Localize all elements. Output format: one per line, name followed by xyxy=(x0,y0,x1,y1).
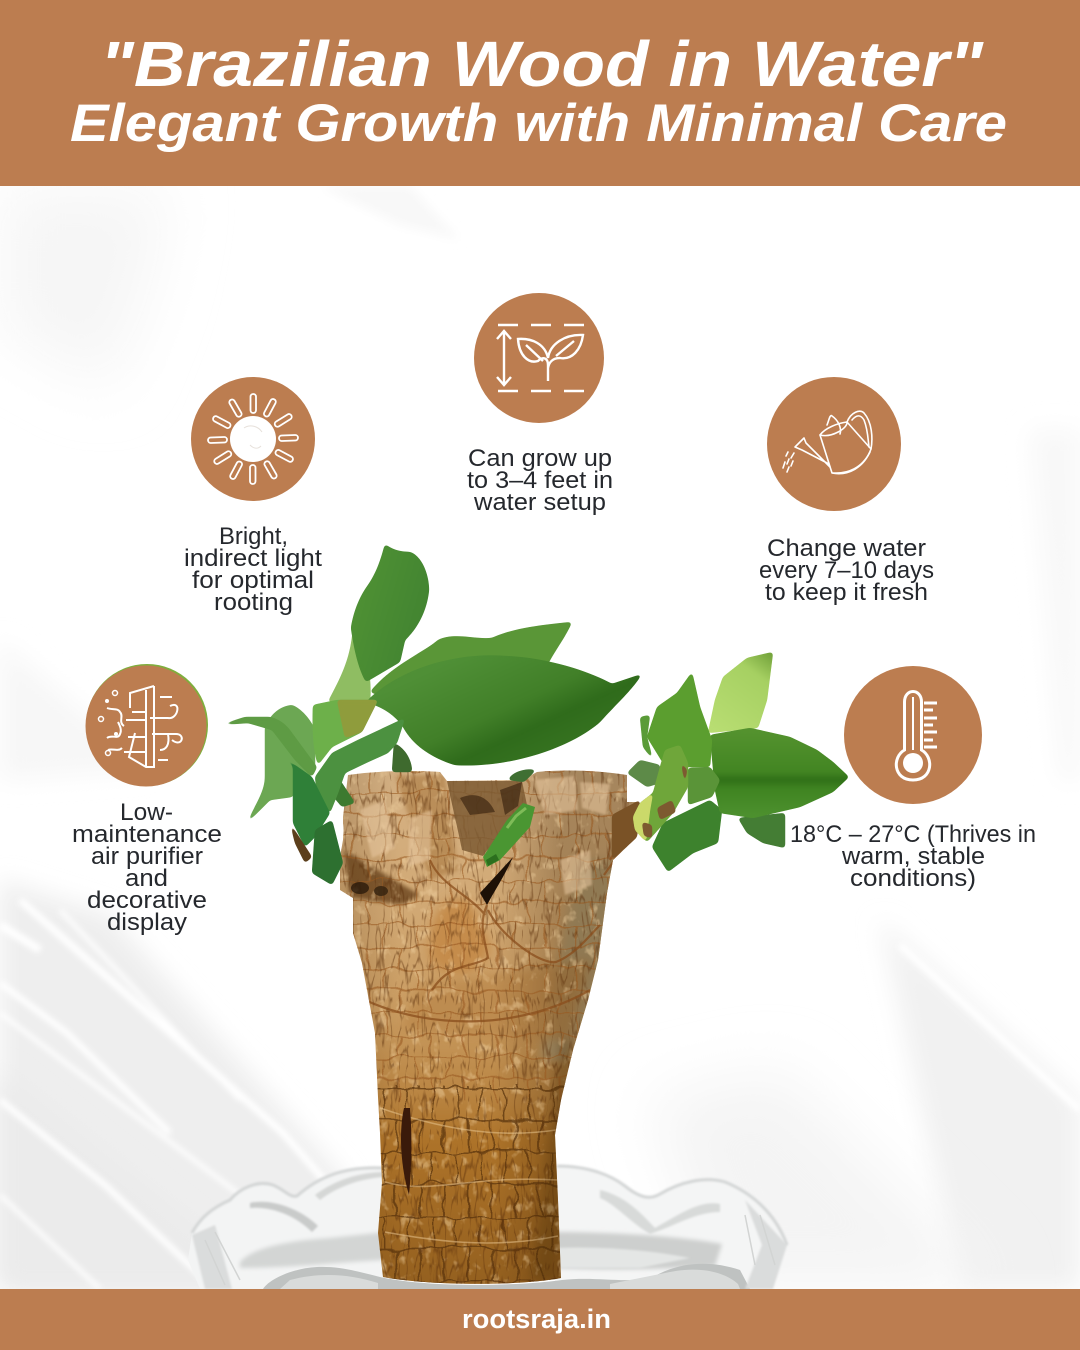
caption: air purifier xyxy=(72,799,222,936)
stem under leaf xyxy=(392,743,412,772)
leaf: centre bright xyxy=(647,672,712,767)
leaf: yellow edge xyxy=(633,793,653,842)
greyer right flank and warm blotches xyxy=(540,860,620,1060)
leaf: centre xyxy=(313,700,378,765)
icon: watering can xyxy=(767,377,901,511)
leaf: folded round xyxy=(688,767,720,805)
plant leaves: right cluster xyxy=(612,652,849,872)
caption: light: Bright, xyxy=(219,523,288,550)
leaf: front yellow green xyxy=(633,745,688,842)
caption: air purifier: display xyxy=(107,909,188,936)
caption: light xyxy=(184,523,322,616)
caption: height: Can grow up xyxy=(468,445,612,472)
caption: water change: to keep it fresh xyxy=(765,579,928,606)
caption: air purifier: decorative xyxy=(87,887,207,914)
leaf: large right xyxy=(710,728,849,818)
leaf: front xyxy=(315,718,405,813)
caption: temperature: warm, stable xyxy=(841,843,985,870)
caption: temperature xyxy=(790,821,1036,892)
bud in trunk fork xyxy=(483,803,535,867)
fork ridge and rings xyxy=(369,851,622,1022)
icon: air purifier xyxy=(86,664,208,786)
glass plate xyxy=(188,1166,787,1289)
caption: light: rooting xyxy=(214,589,293,616)
caption: air purifier: Low- xyxy=(120,799,173,826)
leaf: under-leaf by trunk xyxy=(332,777,355,807)
plant leaves: left cluster xyxy=(220,700,405,885)
leaf: large main xyxy=(366,655,642,765)
leaf: behind centre xyxy=(640,715,653,760)
leaf: back horizontal xyxy=(370,622,572,700)
icon: sun xyxy=(191,377,315,501)
icon: height plant xyxy=(474,293,604,423)
leaf: lower stem wrap xyxy=(272,745,330,847)
footer url: rootsraja.in xyxy=(462,1304,611,1334)
caption: water change: Change water xyxy=(767,535,926,562)
caption: water change: every 7–10 days xyxy=(759,557,934,584)
caption: temperature: conditions) xyxy=(850,865,976,892)
icon: thermometer xyxy=(844,666,982,804)
leaf: lower dark xyxy=(652,800,722,872)
leaf: thin curled xyxy=(220,717,317,777)
caption: light: indirect light xyxy=(184,545,322,572)
branch end xyxy=(612,800,640,860)
leaf: pale base xyxy=(328,625,370,702)
footer band xyxy=(0,1289,1080,1350)
caption: air purifier: air purifier xyxy=(91,843,203,870)
caption: air purifier: maintenance xyxy=(72,821,222,848)
title line 2: Elegant Growth with Minimal Care xyxy=(70,94,1007,153)
caption: height xyxy=(467,445,613,516)
caption: water change xyxy=(759,535,934,606)
title line 1: "Brazilian Wood in Water" xyxy=(100,28,984,100)
caption: temperature: 18°C – 27°C (Thrives in xyxy=(790,821,1036,848)
caption: air purifier: and xyxy=(125,865,168,892)
plant leaves: top cluster xyxy=(328,544,642,782)
leaf: lower dark xyxy=(312,820,343,885)
caption: height: to 3–4 feet in xyxy=(467,467,613,494)
header band xyxy=(0,0,1080,186)
leaf: small grey xyxy=(627,760,660,787)
leaf: back left xyxy=(247,705,315,823)
leaf: brown patches xyxy=(642,762,687,838)
back stump and fork xyxy=(447,781,527,856)
brown leaf base xyxy=(290,823,312,863)
trunk xyxy=(340,770,636,1284)
caption: light: for optimal xyxy=(192,567,314,594)
gap between stem and trunk xyxy=(336,817,344,843)
caption: height: water setup xyxy=(473,489,606,516)
bright stump cells xyxy=(360,776,610,895)
small leaf behind trunk xyxy=(508,769,536,782)
leaf: lower small xyxy=(738,813,785,848)
leaf: tall upright xyxy=(351,544,429,682)
leaf: pale upright xyxy=(708,652,773,733)
